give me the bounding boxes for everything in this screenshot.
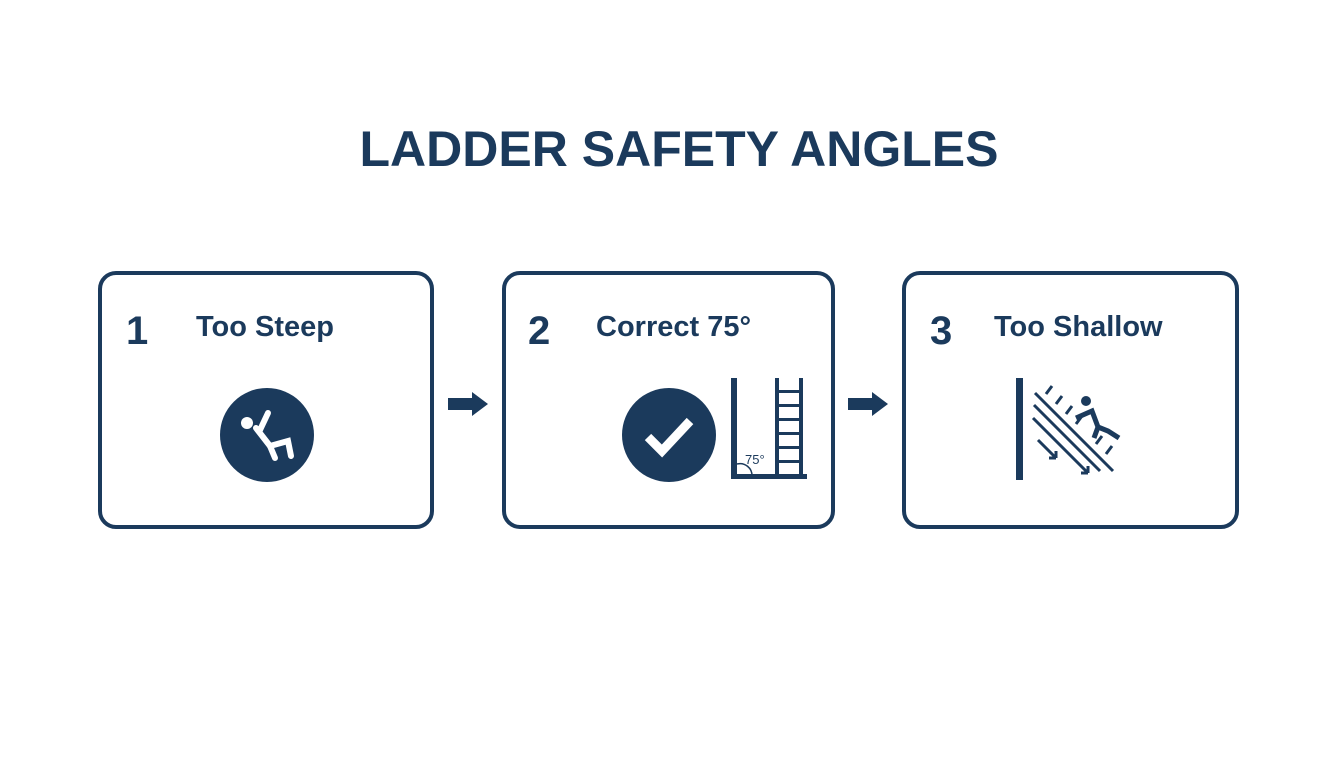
panel: correct 75 (502, 271, 835, 529)
icon: ladder at 75 degrees (731, 378, 807, 479)
arrow 1 (448, 392, 488, 416)
panel: too shallow (902, 271, 1239, 529)
heading: too steep: Too Steep (196, 311, 334, 343)
icon: falling person (220, 388, 314, 482)
panel: too steep (98, 271, 434, 529)
title: LADDER SAFETY ANGLES (360, 121, 998, 177)
number 1: 1 (126, 309, 148, 353)
arrow 2 (848, 392, 888, 416)
number 3: 3 (930, 309, 952, 353)
icon: ladder at 75 degrees: 75° (745, 452, 765, 467)
number 2: 2 (528, 309, 550, 353)
icon: shallow ladder sliding (1016, 378, 1119, 480)
heading: too shallow: Too Shallow (994, 311, 1163, 343)
heading: correct: Correct 75° (596, 311, 751, 343)
icon: check circle (622, 388, 716, 482)
